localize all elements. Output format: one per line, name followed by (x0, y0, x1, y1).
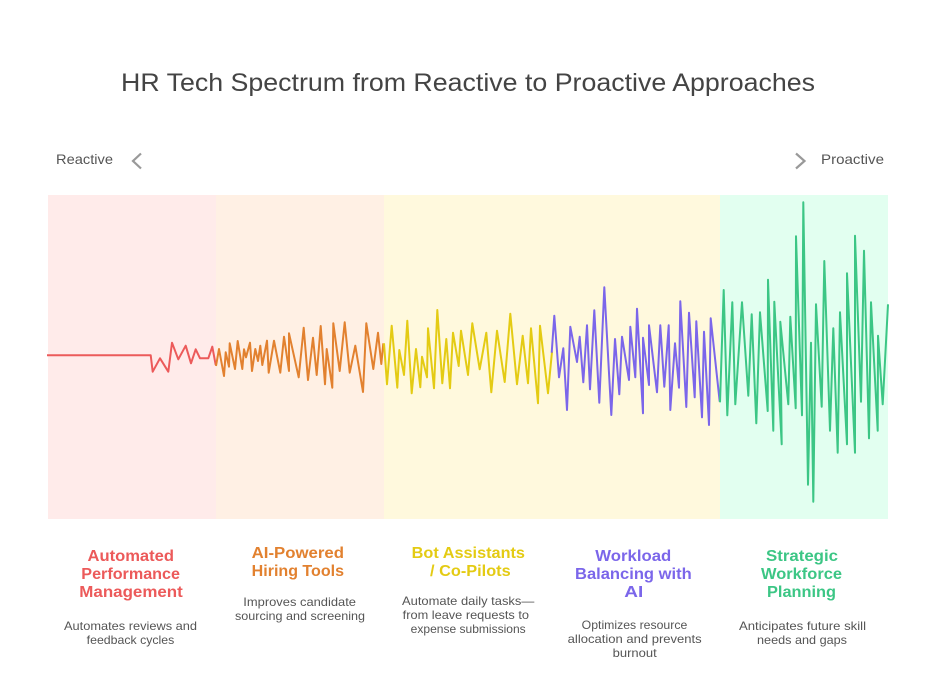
heading (575, 548, 692, 601)
heading: Management (79, 584, 183, 601)
heading: Strategic (766, 548, 838, 565)
description: expense submissions (411, 622, 526, 636)
heading: Hiring Tools (252, 563, 344, 580)
description: needs and gaps (757, 633, 847, 647)
heading (761, 548, 842, 601)
description: Anticipates future skill (739, 619, 866, 633)
label: proactive end (796, 151, 884, 168)
waveform: orange segment (216, 322, 383, 392)
heading (252, 545, 344, 580)
waveform: red segment (47, 343, 216, 372)
heading: Performance (81, 566, 180, 583)
label: proactive end: Proactive (821, 151, 884, 167)
title: HR Tech Spectrum from Reactive to Proactive Approaches (121, 69, 815, 97)
heading: AI (624, 584, 643, 601)
column: bot assistants / co-pilots (402, 545, 534, 636)
waveform: purple segment (552, 287, 720, 425)
description (64, 619, 197, 647)
description: Automate daily tasks— (402, 594, 534, 608)
heading: Automated (88, 548, 174, 565)
column: automated performance management (64, 548, 197, 647)
waveform: yellow segment (384, 310, 552, 403)
column: workload balancing with AI (568, 548, 702, 660)
waveform: green segment (720, 202, 888, 502)
heading (79, 548, 183, 601)
heading: Workload (595, 548, 671, 565)
column: AI-powered hiring tools (235, 545, 365, 623)
description: Improves candidate (243, 595, 356, 609)
band: automated performance management (48, 195, 216, 519)
band: bot assistants and workload balancing (384, 195, 720, 519)
band: AI-powered hiring tools (216, 195, 384, 519)
heading: / Co-Pilots (430, 563, 511, 580)
description (568, 618, 702, 660)
description: burnout (613, 646, 657, 660)
description (402, 594, 534, 636)
heading: Planning (767, 584, 836, 601)
heading: Workforce (761, 566, 842, 583)
label: reactive end (56, 151, 141, 168)
heading (412, 545, 525, 580)
band: strategic workforce planning (720, 195, 888, 519)
waveform chart (47, 202, 888, 502)
heading: Balancing with (575, 566, 692, 583)
description: feedback cycles (87, 633, 174, 647)
description (235, 595, 365, 623)
label: reactive end: Reactive (56, 151, 113, 167)
description: Automates reviews and (64, 619, 197, 633)
column: strategic workforce planning (739, 548, 866, 647)
heading: Bot Assistants (412, 545, 525, 562)
description: allocation and prevents (568, 632, 702, 646)
description (739, 619, 866, 647)
description: from leave requests to (403, 608, 529, 622)
description: sourcing and screening (235, 609, 365, 623)
heading: AI-Powered (252, 545, 344, 562)
description: Optimizes resource (582, 618, 688, 632)
